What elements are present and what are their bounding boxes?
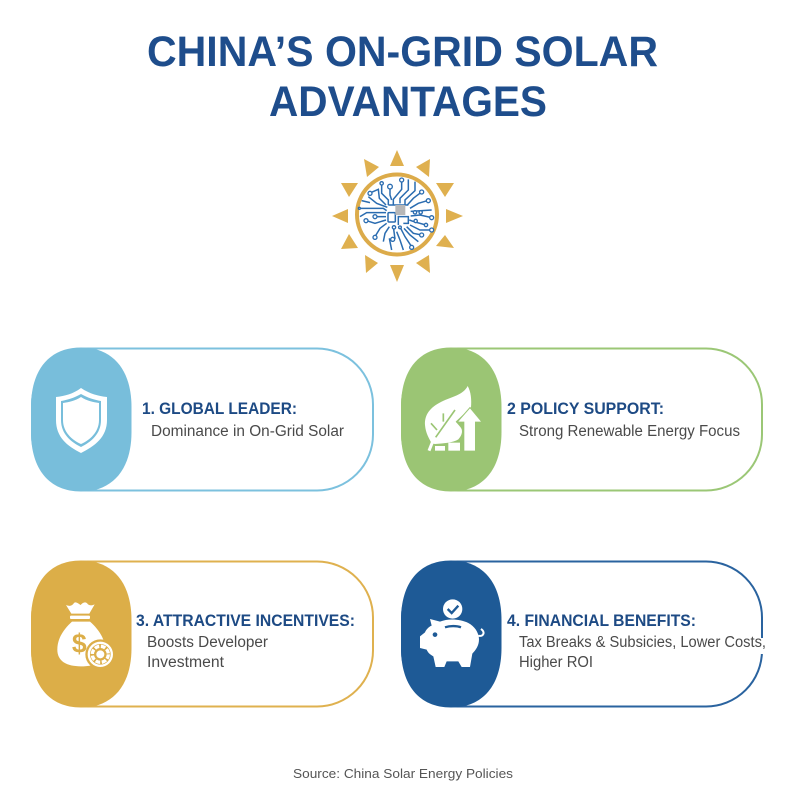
circuit traces <box>360 179 432 250</box>
panel: financial benefits <box>401 560 767 708</box>
description: Dominance in On-Grid Solar <box>151 423 344 440</box>
description: Boosts Developer <box>147 634 268 651</box>
colour block <box>31 348 132 492</box>
description: Tax Breaks & Subsicies, Lower Costs, <box>519 634 766 651</box>
description: Higher ROI <box>519 654 593 671</box>
icon: shield <box>56 388 107 453</box>
heading: 2 POLICY SUPPORT: <box>507 400 664 418</box>
description <box>147 634 268 671</box>
icon: piggy bank with check coin <box>420 599 484 667</box>
circuit board <box>358 178 434 250</box>
description <box>519 634 766 671</box>
colour block <box>401 560 502 708</box>
colour block <box>401 348 502 492</box>
border gap behind text <box>757 638 767 654</box>
panel: policy support <box>401 348 762 492</box>
title: ADVANTAGES <box>269 78 547 126</box>
source note: Source: China Solar Energy Policies <box>293 766 514 781</box>
card outline <box>402 562 762 706</box>
gold ring <box>357 174 437 254</box>
title <box>147 28 658 126</box>
icon: money bag with coin <box>57 602 115 669</box>
icon: sun with circuit board <box>332 150 463 282</box>
heading: 4. FINANCIAL BENEFITS: <box>507 612 696 630</box>
panel: global leader <box>31 348 373 492</box>
icon: leaf with growth arrow <box>425 386 481 451</box>
heading: 1. GLOBAL LEADER: <box>142 400 297 418</box>
description: Investment <box>147 654 225 671</box>
panel: attractive incentives <box>31 560 373 708</box>
title: CHINA’S ON-GRID SOLAR <box>147 28 658 76</box>
colour block <box>31 560 132 708</box>
circuit chip <box>395 205 405 215</box>
icon: money bag with coin: $ <box>72 628 87 658</box>
sun rays <box>332 150 463 282</box>
card outline <box>402 348 762 490</box>
description: Strong Renewable Energy Focus <box>519 423 740 440</box>
circuit nodes <box>358 178 434 249</box>
card outline <box>32 562 373 706</box>
card outline <box>32 348 373 490</box>
heading: 3. ATTRACTIVE INCENTIVES: <box>136 612 355 630</box>
